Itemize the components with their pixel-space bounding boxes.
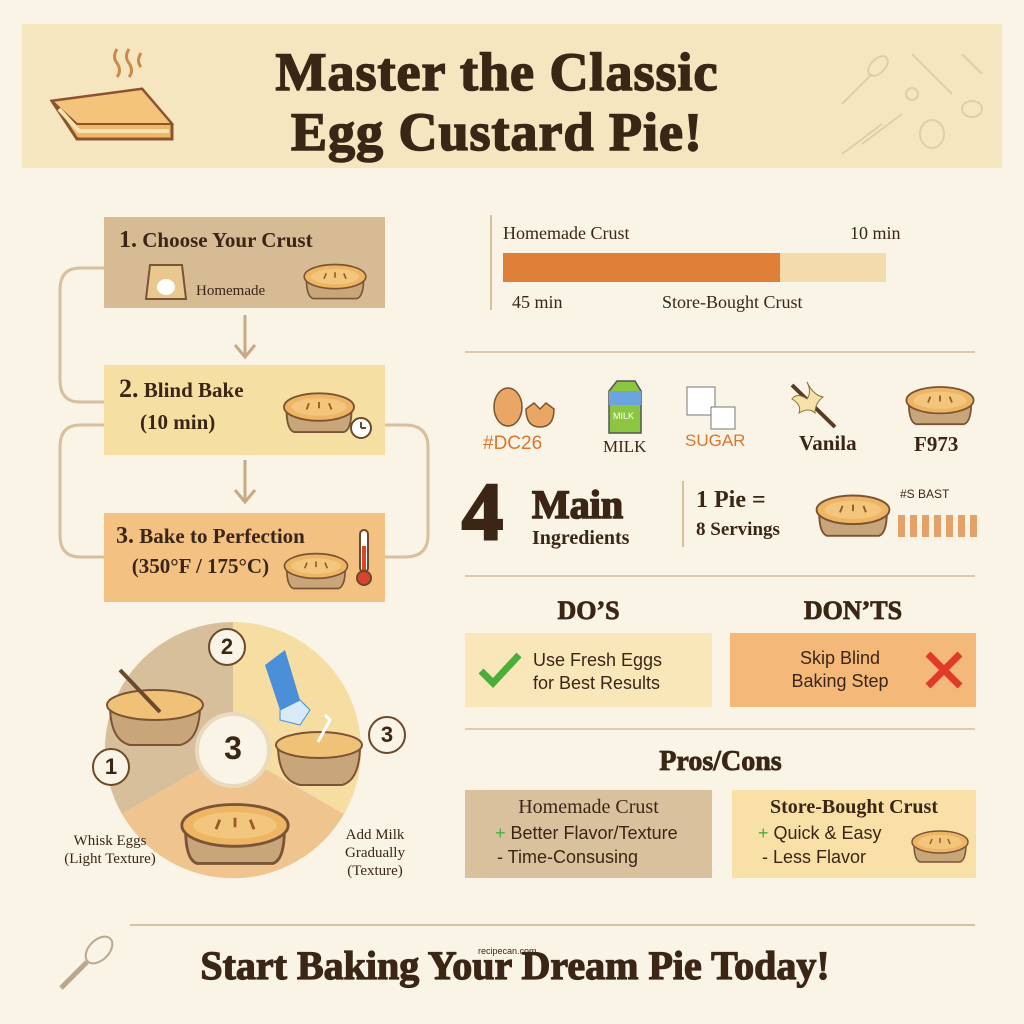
pie process chart xyxy=(64,622,406,879)
title xyxy=(276,42,718,163)
text: + Quick & Easy xyxy=(758,823,882,843)
main ingredients stat: 4 xyxy=(462,466,503,557)
label: whisk eggs: (Light Texture) xyxy=(64,851,156,867)
pie process chart: 3 xyxy=(381,722,393,747)
step 3: (350°F / 175°C) xyxy=(132,554,269,578)
footer call to action: Start Baking Your Dream Pie Today! xyxy=(200,943,830,988)
step 2: 2. Blind Bake xyxy=(119,374,244,403)
text: Use Fresh Eggs xyxy=(533,650,662,670)
ingredients row: Vanila xyxy=(799,431,857,455)
step 3 xyxy=(104,513,385,602)
main ingredients stat: 8 Servings xyxy=(696,519,780,540)
crust time bar xyxy=(490,215,901,312)
ingredients row: F973 xyxy=(914,432,958,456)
step 1: 1. Choose Your Crust xyxy=(119,227,313,253)
text: - Time-Consusing xyxy=(497,847,638,867)
pie process chart: 1 xyxy=(105,754,117,779)
main ingredients stat: #S BAST xyxy=(900,487,949,501)
ingredients row: SUGAR xyxy=(685,431,745,450)
header banner xyxy=(22,24,1002,168)
flow connector lines xyxy=(58,266,430,558)
step 3: 3. Bake to Perfection xyxy=(116,523,305,549)
pie process chart: 3 xyxy=(224,730,242,766)
decorative utensils pattern xyxy=(842,54,983,154)
step badges: 2 xyxy=(221,634,233,659)
label: whisk eggs xyxy=(64,833,156,867)
pros/cons: Pros/Cons xyxy=(659,746,782,777)
main ingredients stat xyxy=(462,466,977,557)
do's and don'ts: DO’S xyxy=(557,596,620,625)
step badges xyxy=(208,628,246,666)
crust time bar: Homemade Crust xyxy=(503,223,629,243)
source text: recipecan.com xyxy=(478,946,537,956)
step 2 xyxy=(104,365,385,455)
text: + Better Flavor/Texture xyxy=(495,823,678,843)
label: add milk: Add Milk Gradually (Texture) xyxy=(345,827,405,879)
icon: whisk xyxy=(59,936,114,990)
main ingredients stat: Ingredients xyxy=(532,527,629,549)
icon: pie slice xyxy=(50,48,174,140)
text: DON’TS xyxy=(804,596,902,625)
crust time bar: 45 min xyxy=(512,292,563,312)
text: Store-Bought Crust xyxy=(770,796,938,818)
label: whisk eggs: Whisk Eggs xyxy=(74,833,146,849)
ingredients row: MILK xyxy=(603,437,646,456)
title: Master the Classic xyxy=(276,42,718,102)
ingredients row xyxy=(483,380,974,456)
text: Homemade Crust xyxy=(518,796,659,818)
main ingredients stat: 1 Pie = xyxy=(696,487,766,513)
step 1 xyxy=(104,217,385,308)
ingredients row: #DC26 xyxy=(483,433,542,454)
text: - Less Flavor xyxy=(762,847,866,867)
step 1: Homemade xyxy=(196,283,265,299)
icon: flour bag xyxy=(144,264,188,300)
step 2: (10 min) xyxy=(140,410,215,434)
ingredients row: MILK xyxy=(613,411,634,421)
main ingredients stat: Main xyxy=(532,482,623,527)
text: for Best Results xyxy=(533,673,660,693)
text: Skip Blind Baking Step xyxy=(791,648,889,691)
crust time bar: 10 min xyxy=(850,223,901,243)
title: Egg Custard Pie! xyxy=(291,102,703,162)
crust time bar: Store-Bought Crust xyxy=(662,292,803,312)
